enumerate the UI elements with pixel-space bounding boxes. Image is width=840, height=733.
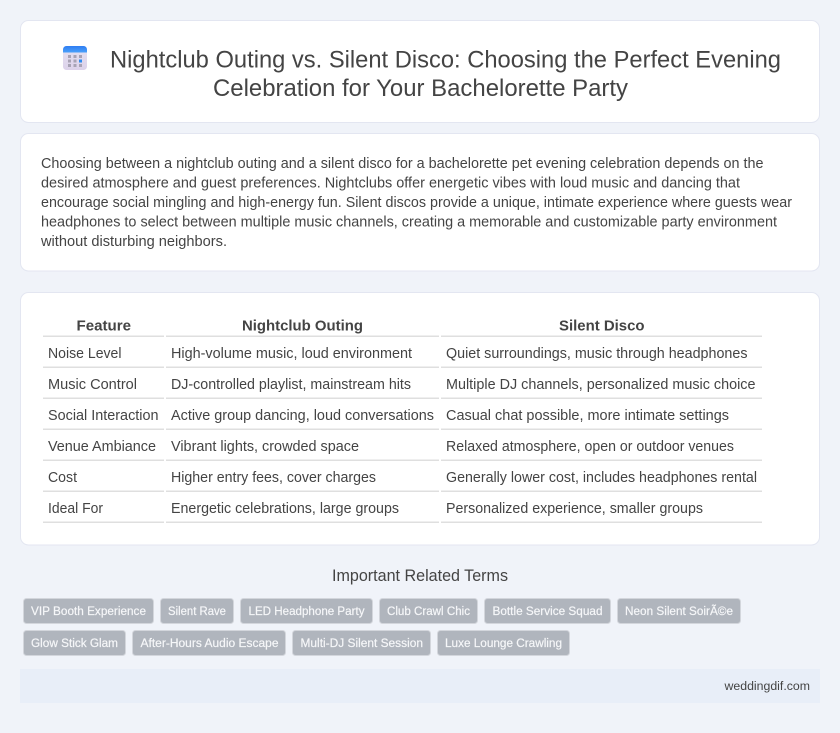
footer source text: weddingdif.com [723, 679, 810, 693]
tag: Bottle Service Squad: Bottle Service Squad [492, 604, 603, 618]
table row: music control: DJ-controlled playlist, mainstream hits [171, 377, 411, 393]
table header row [43, 318, 762, 337]
table row: cost: Higher entry fees, cover charges [171, 470, 376, 486]
table row: social interaction: Social Interaction [48, 408, 158, 424]
tag: Silent Rave: Silent Rave [168, 604, 226, 618]
tag: Glow Stick Glam [24, 630, 126, 656]
tag: After-Hours Audio Escape: After-Hours Audio Escape [140, 636, 279, 650]
title [110, 46, 781, 102]
tag: After-Hours Audio Escape [132, 630, 286, 656]
table row: venue ambiance [43, 439, 762, 461]
table row: music control: Music Control [48, 377, 137, 393]
panel: introduction [20, 134, 820, 271]
tag: LED Headphone Party: LED Headphone Party [248, 604, 365, 618]
tag: VIP Booth Experience [24, 598, 154, 624]
table row: cost: Generally lower cost, includes headphones rental [446, 470, 757, 486]
tag: Neon Silent Soiree [618, 598, 740, 624]
table row: venue ambiance: Relaxed atmosphere, open or outdoor venues [446, 439, 734, 455]
table row: noise level: Noise Level [48, 346, 122, 362]
icon: calendar [63, 46, 87, 70]
text block: introduction paragraph: encourage social mingling and high-energy fun. Silent discos provide a unique, intimate experience where guests wear [41, 195, 792, 211]
table header row: Feature [76, 318, 131, 334]
tag: Multi-DJ Silent Session: Multi-DJ Silent Session [300, 636, 423, 650]
text block: introduction paragraph: Choosing between a nightclub outing and a silent disco for a bachelorette pet evening celebration depends on the [41, 156, 764, 172]
table header row: Silent Disco [559, 318, 644, 334]
tag: Multi-DJ Silent Session [292, 630, 430, 656]
table row: music control [43, 377, 762, 399]
table row: social interaction [43, 408, 762, 430]
text block: introduction paragraph: headphones to select between multiple music channels, creating a memorable and customizable party environment [41, 214, 777, 230]
tag: Neon Silent Soiree: Neon Silent SoirÃ©e [625, 604, 733, 618]
table row: cost: Cost [48, 470, 77, 486]
table header row: Nightclub Outing [242, 318, 363, 334]
table row: ideal for: Energetic celebrations, large groups [171, 501, 399, 517]
panel: comparison table [20, 292, 820, 545]
table row: noise level: Quiet surroundings, music through headphones [446, 346, 748, 362]
tag: Silent Rave [160, 598, 234, 624]
footer bar [20, 669, 820, 703]
table row: noise level [43, 346, 762, 368]
tag: Luxe Lounge Crawling [438, 630, 570, 656]
tag: Bottle Service Squad [484, 598, 610, 624]
table row: noise level: High-volume music, loud environment [171, 346, 412, 362]
tag: Club Crawl Chic: Club Crawl Chic [387, 604, 470, 618]
text block: introduction paragraph: desired atmosphere and guest preferences. Nightclubs offer energetic vibes with loud music and dancing that [41, 176, 740, 192]
table row: ideal for: Personalized experience, smaller groups [446, 501, 703, 517]
panel: title header [20, 20, 820, 122]
table row: social interaction: Casual chat possible, more intimate settings [446, 408, 729, 424]
text block: introduction paragraph [40, 156, 792, 250]
tag: Luxe Lounge Crawling: Luxe Lounge Crawling [445, 636, 562, 650]
table row: ideal for [43, 501, 762, 523]
tag: Glow Stick Glam: Glow Stick Glam [31, 636, 118, 650]
table row: venue ambiance: Venue Ambiance [48, 439, 156, 455]
table row: venue ambiance: Vibrant lights, crowded space [171, 439, 359, 455]
tag: Club Crawl Chic [380, 598, 478, 624]
table row: social interaction: Active group dancing, loud conversations [171, 408, 434, 424]
tag: VIP Booth Experience: VIP Booth Experience [31, 604, 146, 618]
table row: cost [43, 470, 762, 492]
tag: LED Headphone Party [240, 598, 372, 624]
text block: introduction paragraph: without disturbing neighbors. [40, 234, 227, 250]
tag group: related terms [24, 598, 740, 656]
heading: important related terms: Important Related Terms [332, 567, 508, 585]
table row: ideal for: Ideal For [48, 501, 103, 517]
title: Celebration for Your Bachelorette Party [213, 75, 629, 102]
table row: music control: Multiple DJ channels, personalized music choice [446, 377, 756, 393]
title: Nightclub Outing vs. Silent Disco: Choosing the Perfect Evening [110, 46, 781, 74]
